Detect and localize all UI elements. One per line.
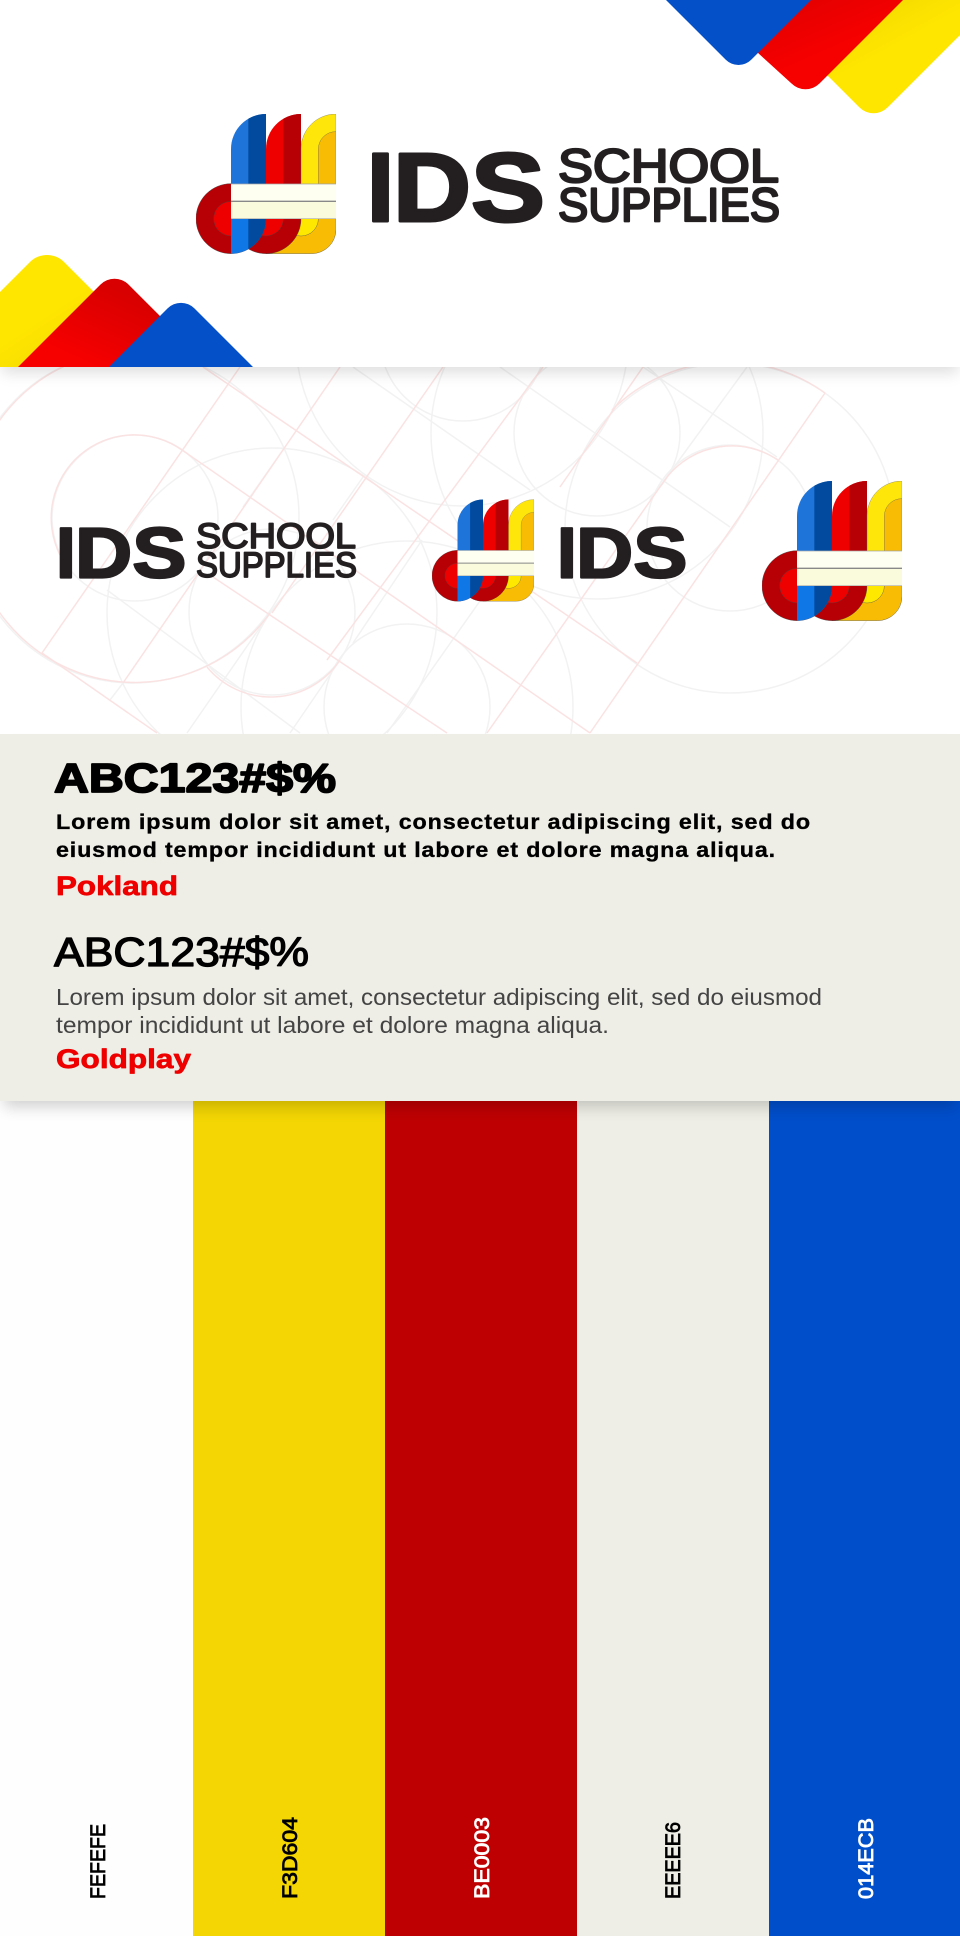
logo: IDS wordmark: I bbox=[367, 133, 394, 242]
Goldplay specimen: Lorem ipsum dolor sit amet, consectetur adipiscing elit, sed do eiusmod bbox=[56, 984, 822, 1010]
panel: logo variations over construction grid bbox=[0, 367, 960, 734]
corner shapes: top right bbox=[666, 0, 960, 113]
swatch: FEFEFE: FEFEFE bbox=[87, 1824, 110, 1899]
swatch: FEFEFE bbox=[0, 1101, 193, 1936]
logo: mark only bbox=[762, 481, 902, 621]
Goldplay specimen: tempor incididunt ut labore et dolore magna aliqua. bbox=[56, 1012, 609, 1038]
Goldplay specimen: Goldplay bbox=[56, 1044, 191, 1074]
swatch: EEEEE6 bbox=[577, 1101, 769, 1936]
Pokland specimen: Pokland bbox=[56, 871, 178, 901]
swatch: 014ECB: 014ECB bbox=[855, 1818, 878, 1899]
logo: wordmark only: S bbox=[132, 514, 186, 593]
logo: wordmark only: SUPPLIES bbox=[196, 546, 357, 585]
logo: School Supplies: SCHOOL bbox=[558, 139, 779, 192]
swatch: F3D604: F3D604 bbox=[279, 1817, 302, 1899]
logo: mark with IDS: D bbox=[576, 514, 633, 593]
Pokland specimen: ABC123#$% bbox=[54, 755, 336, 801]
Pokland specimen bbox=[54, 755, 811, 901]
Pokland specimen: Lorem ipsum dolor sit amet, consectetur adipiscing elit, sed do bbox=[56, 810, 811, 834]
swatch: F3D604 bbox=[193, 1101, 385, 1936]
Goldplay specimen: ABC123#$% bbox=[54, 929, 309, 975]
corner shapes: bottom left bbox=[0, 255, 253, 367]
logo: School Supplies bbox=[558, 139, 780, 231]
logo: wordmark only: SCHOOL bbox=[196, 517, 356, 556]
panel: typography specimens bbox=[0, 734, 960, 1101]
Goldplay specimen bbox=[54, 929, 822, 1074]
panel: hero logo banner bbox=[0, 0, 960, 367]
swatch: 014ECB bbox=[769, 1101, 960, 1936]
logo: mark with IDS: I bbox=[557, 514, 577, 593]
swatch: BE0003: BE0003 bbox=[471, 1817, 494, 1899]
logo: IDS wordmark bbox=[367, 133, 545, 242]
swatch: BE0003 bbox=[385, 1101, 577, 1936]
logo: wordmark only: I bbox=[56, 514, 76, 593]
logo: wordmark only: D bbox=[75, 514, 132, 593]
logo: mark with IDS: S bbox=[633, 514, 687, 593]
logo: mark bbox=[196, 114, 336, 254]
logo: School Supplies: SUPPLIES bbox=[558, 178, 780, 231]
colour palette swatches bbox=[87, 1101, 960, 1936]
logo: wordmark only bbox=[56, 514, 357, 593]
Pokland specimen: eiusmod tempor incididunt ut labore et dolore magna aliqua. bbox=[56, 838, 776, 862]
swatch: EEEEE6: EEEEE6 bbox=[662, 1822, 685, 1899]
logo: mark with IDS bbox=[432, 500, 687, 601]
logo: IDS wordmark: S bbox=[471, 133, 545, 242]
logo: IDS wordmark: D bbox=[393, 133, 471, 242]
